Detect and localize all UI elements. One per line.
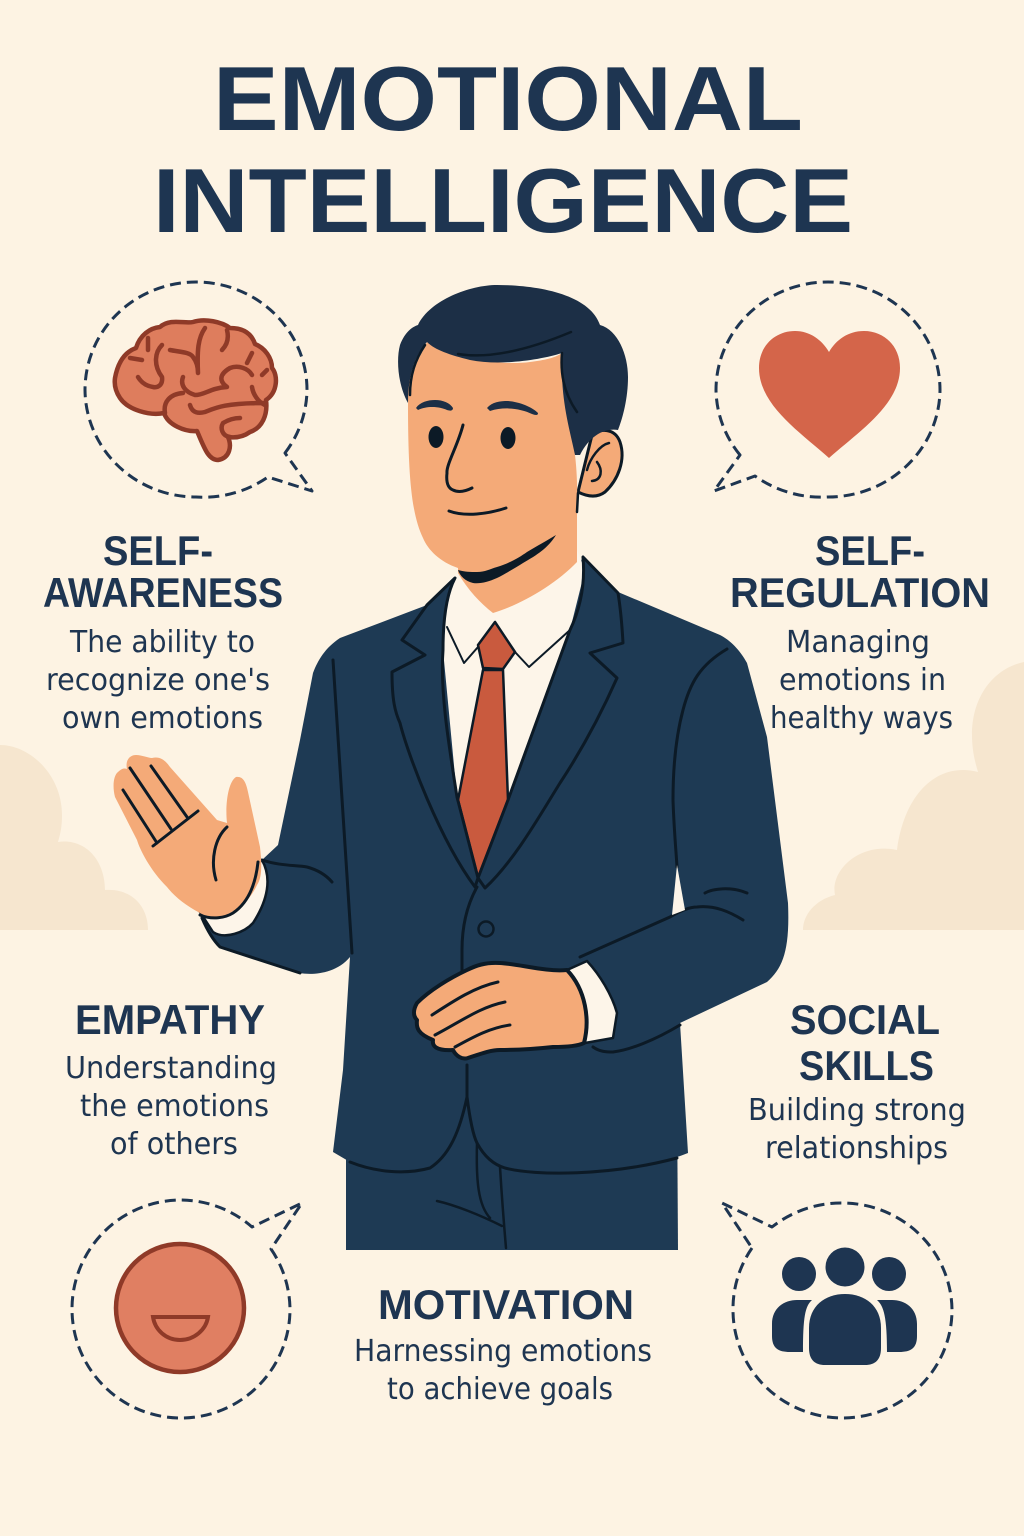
neck line under ear — [577, 493, 578, 512]
hair lines — [410, 332, 577, 412]
background cloud right — [803, 662, 1024, 930]
text block: empathy: of others — [110, 1127, 238, 1162]
title — [153, 49, 853, 252]
nose and mouth — [447, 425, 506, 514]
shirt gap under right arm — [672, 865, 685, 915]
text block: social skills: Building strong — [748, 1093, 966, 1128]
icon: brain — [115, 320, 276, 460]
text block: self-regulation: Managing — [786, 625, 930, 660]
chin shadow — [458, 535, 556, 583]
figure: man in suit — [114, 285, 788, 1250]
left lapel — [392, 578, 478, 887]
text block: self-regulation: emotions in — [779, 663, 946, 698]
text block: self-regulation: REGULATION — [730, 569, 990, 616]
text block: social skills: relationships — [765, 1131, 948, 1166]
collar lines — [447, 627, 570, 667]
trousers — [346, 1090, 678, 1250]
text block: social skills — [748, 996, 966, 1166]
text block: self-awareness: The ability to — [69, 625, 255, 660]
neck — [458, 500, 577, 613]
text block: social skills: SOCIAL — [790, 996, 940, 1043]
text block: motivation: MOTIVATION — [378, 1281, 634, 1328]
shirt — [443, 550, 585, 797]
title: INTELLIGENCE — [153, 151, 853, 252]
resting hand — [414, 963, 587, 1059]
panel: self-awareness bubble — [85, 282, 312, 497]
raised hand — [114, 755, 261, 918]
text block: empathy: EMPATHY — [75, 996, 265, 1043]
text block: self-regulation — [730, 527, 990, 736]
left cuff — [200, 860, 268, 935]
text block: motivation: Harnessing emotions — [354, 1334, 652, 1369]
title: EMOTIONAL — [213, 49, 803, 150]
panel: social skills bubble — [722, 1203, 952, 1418]
text block: self-awareness: own emotions — [62, 701, 263, 736]
text block: self-regulation: SELF- — [815, 527, 925, 574]
tie — [458, 622, 515, 878]
ear — [578, 430, 622, 496]
hair — [398, 285, 628, 455]
icon: heart — [759, 331, 900, 458]
text block: self-awareness: recognize one's — [46, 663, 270, 698]
text block: empathy: the emotions — [80, 1089, 269, 1124]
text block: social skills: SKILLS — [799, 1042, 934, 1089]
jacket seams — [202, 649, 747, 1173]
text block: self-regulation: healthy ways — [770, 701, 953, 736]
jacket — [202, 557, 788, 1175]
text block: motivation — [354, 1281, 652, 1407]
right cuff — [567, 961, 617, 1043]
panel: self-regulation bubble — [714, 282, 940, 497]
eyes — [428, 426, 516, 449]
panel: empathy bubble — [72, 1200, 302, 1418]
text block: empathy — [65, 996, 277, 1162]
text block: self-awareness: SELF- — [103, 527, 213, 574]
eyebrows — [416, 400, 538, 415]
text block: empathy: Understanding — [65, 1051, 277, 1086]
text block: self-awareness — [43, 527, 283, 736]
icon: group of people — [772, 1248, 917, 1365]
text block: motivation: to achieve goals — [387, 1372, 613, 1407]
jacket button — [478, 922, 494, 936]
text block: self-awareness: AWARENESS — [43, 569, 283, 616]
background cloud left — [0, 745, 148, 930]
face — [408, 342, 577, 568]
right lapel — [478, 557, 623, 888]
icon: smiling face — [116, 1244, 244, 1372]
